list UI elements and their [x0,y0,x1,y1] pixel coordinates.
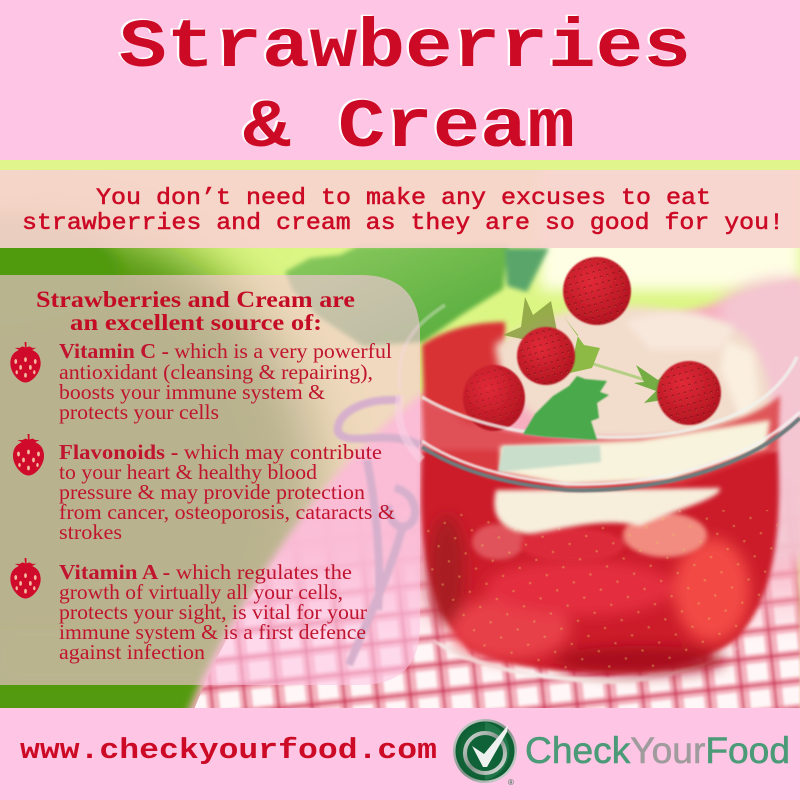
text block: Vitamin A: protects your sight, is vital for your [59,600,367,624]
text block: Vitamin C [59,339,392,424]
pale green strip [0,160,800,170]
text block: Flavonoids: strokes [59,520,122,544]
icon: strawberry 2 [13,434,44,476]
front glass and cream on lid [422,395,780,488]
title: Strawberries [119,9,691,87]
title [117,8,691,167]
panel heading: Strawberries and Cream are [36,287,355,312]
logo: Check Your Food [453,719,790,787]
text block: Vitamin C: antioxidant (cleansing & repairing), [59,360,373,384]
text block: Vitamin C: boosts your immune system & [59,380,325,404]
text block: Vitamin A: against infection [59,640,206,664]
panel heading: an excellent source of: [70,310,322,335]
wild strawberries and leaf [503,257,721,440]
background leaves [285,244,549,346]
text block: Flavonoids: from cancer, osteoporosis, cataracts & [59,500,395,524]
text block: Vitamin A: Vitamin A - which regulates the [59,560,352,584]
registered mark: ® [508,778,514,787]
half strawberry in the jar [463,365,525,431]
panel: nutrients [0,275,420,685]
logo wordmark: CheckYourFood [525,730,790,771]
title: & Cream [241,88,573,166]
subtitle band: strawberries and cream as they are so good for you! [22,210,784,236]
text block: Flavonoids [59,440,395,544]
jar clasp wires [338,400,420,665]
title: & Cream [243,89,575,167]
icon: strawberry 3 [10,558,41,599]
subtitle band [0,170,800,248]
jar contents [421,450,779,672]
text block: Vitamin A: growth of virtually all your cells, [59,580,343,604]
footer band [0,708,800,800]
panel heading [36,287,355,335]
photo: jar of strawberries and cream [0,184,800,708]
text block: Flavonoids: Flavonoids - which may contribute [59,440,382,464]
subtitle band: You don’t need to make any excuses to eat [96,185,711,211]
website url: www.checkyourfood.com [20,734,437,767]
icon: check badge [453,719,517,783]
title: Strawberries [117,8,689,86]
text block: Vitamin A [59,560,367,664]
cream and upper strawberries [422,322,505,425]
text block: Flavonoids: pressure & may provide protection [59,480,366,504]
text block: Vitamin C: Vitamin C - which is a very powerful [59,339,392,363]
icon: strawberry 1 [10,342,41,383]
text block: Vitamin A: immune system & is a first defence [59,620,366,644]
text block: Flavonoids: to your heart & healthy blood [59,460,318,484]
text block: Vitamin C: protects your cells [59,400,219,424]
